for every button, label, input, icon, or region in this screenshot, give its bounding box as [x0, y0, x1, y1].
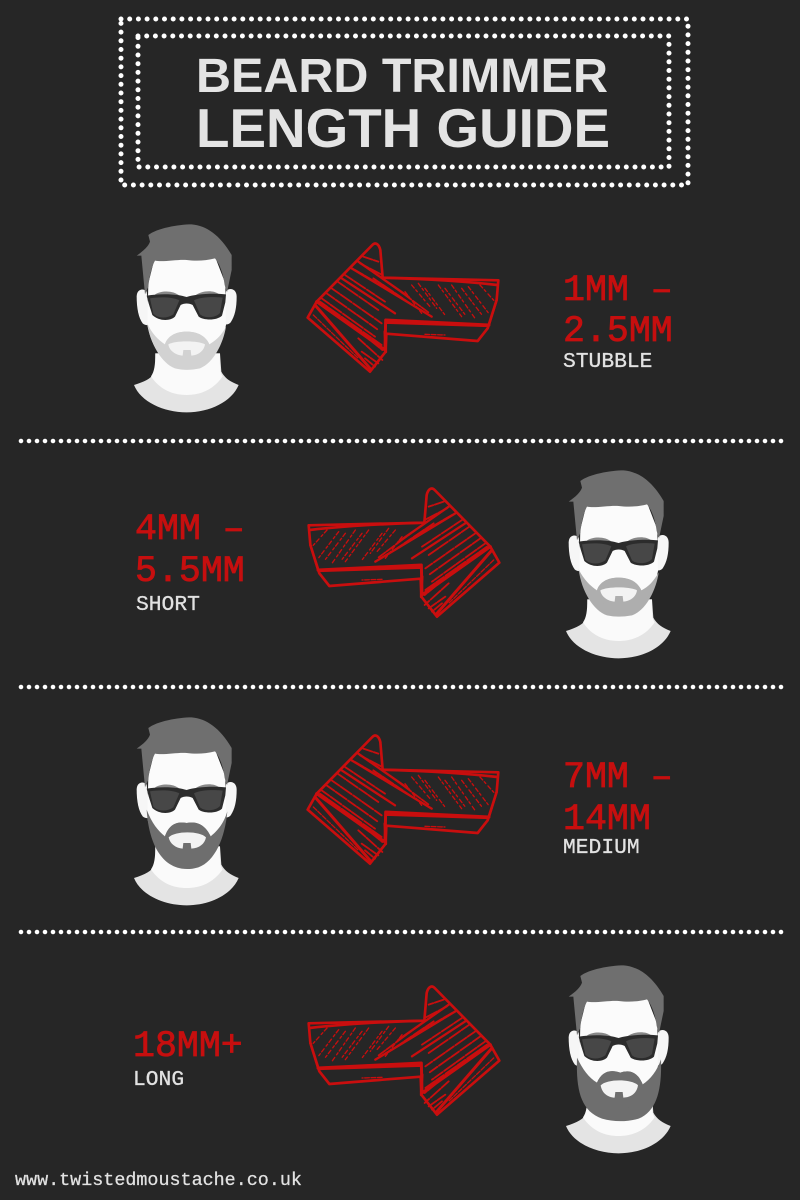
- length: 4mm to 5.5mm: 4MM –: [135, 509, 245, 550]
- length second line: 2.5MM: [563, 311, 673, 352]
- title line 1: BEARD TRIMMER: [196, 50, 608, 103]
- inner dotted frame: [138, 36, 669, 167]
- row: long: [133, 965, 671, 1153]
- icon: face with long beard: [566, 965, 671, 1153]
- label: short: SHORT: [136, 593, 200, 617]
- row: medium: [134, 717, 673, 905]
- row: stubble: [134, 224, 673, 412]
- divider: [21, 930, 782, 934]
- icon: face with stubble: [134, 224, 239, 412]
- arrow pointing right: [309, 987, 499, 1115]
- divider: [21, 439, 782, 443]
- footer website: www.twistedmoustache.co.uk: [15, 1170, 302, 1191]
- arrow pointing left: [308, 736, 498, 864]
- length: 18mm plus: 18MM+: [133, 1026, 243, 1067]
- label: long: LONG: [133, 1068, 184, 1092]
- label: medium: MEDIUM: [563, 836, 640, 860]
- title banner: [121, 19, 688, 185]
- icon: face with medium beard: [134, 717, 239, 905]
- outer dotted frame: [121, 19, 688, 185]
- length: 7mm to 14mm: 7MM –: [563, 757, 673, 798]
- length: 1mm to 2.5mm: 1MM –: [563, 270, 673, 311]
- title line 2: LENGTH GUIDE: [196, 97, 610, 159]
- icon: face with short beard: [566, 470, 671, 658]
- arrow pointing right: [309, 489, 499, 617]
- length second line: 5.5MM: [135, 551, 245, 592]
- arrow pointing left: [308, 244, 498, 372]
- row: short: [135, 470, 671, 658]
- divider: [21, 685, 782, 689]
- length second line: 14MM: [563, 799, 651, 840]
- label: stubble: STUBBLE: [563, 350, 652, 374]
